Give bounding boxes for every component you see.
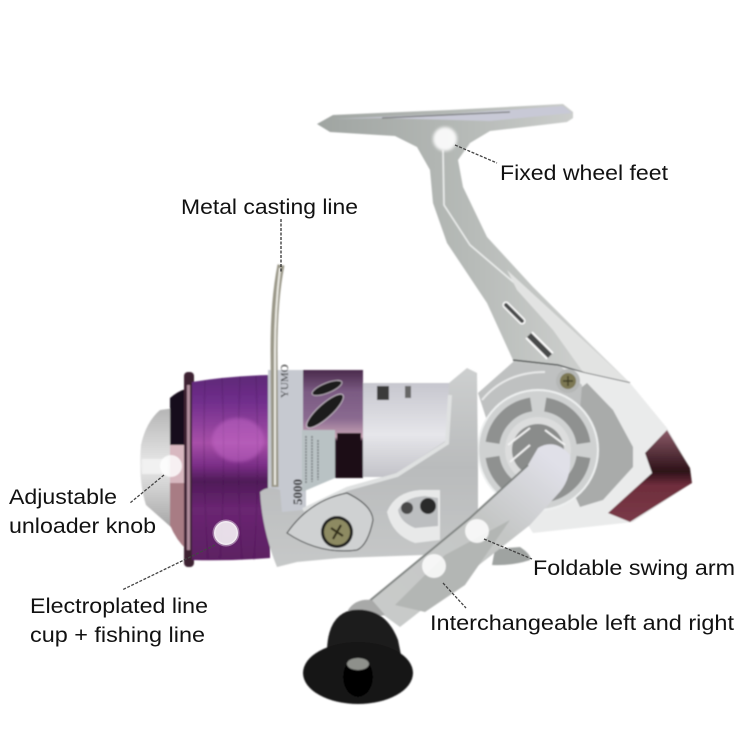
nose centre bar <box>142 459 168 474</box>
leader line: interchangeable <box>443 583 466 608</box>
body and bail arm <box>260 368 478 567</box>
label: Electroplated line cup + fishing line: Electroplated line <box>30 595 208 618</box>
hotspot: fixed wheel feet <box>433 127 457 151</box>
purple fishing line spool <box>192 375 270 560</box>
electroplated cup ring <box>170 372 194 567</box>
gear housing <box>478 362 598 510</box>
label: Foldable swing arm: Foldable swing arm <box>533 557 735 580</box>
label: Adjustable unloader knob: Adjustable <box>9 486 117 509</box>
text on cylinder <box>377 386 411 400</box>
sticker number: 5000 <box>290 479 305 505</box>
leader line: fixed wheel feet <box>455 145 497 163</box>
fixed wheel foot and stem <box>317 104 630 400</box>
swing arm handle <box>348 444 570 627</box>
spool sleeve <box>268 370 306 515</box>
rear cylinder <box>360 383 452 477</box>
body holes <box>401 498 436 514</box>
label: Adjustable unloader knob: unloader knob <box>9 515 156 538</box>
hotspot: line cup <box>214 521 238 545</box>
leader line: unloader knob <box>130 475 164 503</box>
hotspot: interchangeable <box>422 554 446 578</box>
label: Interchangeable left and right: Interchangeable left and right <box>430 612 734 635</box>
leader line: foldable arm <box>484 539 532 559</box>
bail wire <box>274 265 281 487</box>
label sticker <box>302 430 335 492</box>
hotspot: unloader knob <box>160 455 182 477</box>
unloader knob nose <box>140 408 175 528</box>
sticker fine print <box>306 436 318 484</box>
label: Electroplated line cup + fishing line: cup + fishing line <box>30 624 205 647</box>
handle knob <box>303 610 413 704</box>
leader line: line cup <box>122 545 215 590</box>
rear tail with purple tip <box>490 362 692 533</box>
label: Metal casting line: Metal casting line <box>181 196 358 219</box>
screw on frame <box>556 369 580 393</box>
foot under handle <box>492 547 530 565</box>
label: Fixed wheel feet: Fixed wheel feet <box>500 162 668 185</box>
label: Adjustable unloader knob <box>9 486 156 538</box>
chrome purple sleeve <box>302 370 363 478</box>
label: Electroplated line cup + fishing line <box>30 595 208 647</box>
hotspot: foldable arm <box>465 519 489 543</box>
brand text on sleeve: YUMO <box>279 364 291 398</box>
body screw <box>321 516 353 548</box>
leader line: metal casting line <box>280 219 282 272</box>
bail wire highlight <box>275 268 280 485</box>
fishing reel illustration <box>140 104 692 704</box>
